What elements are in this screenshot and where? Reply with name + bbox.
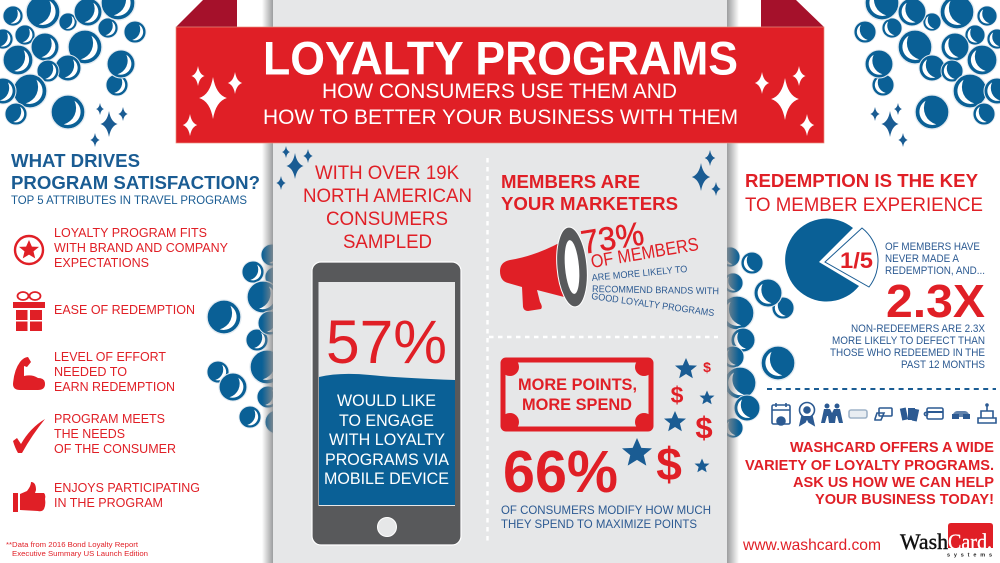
title banner (176, 0, 824, 143)
subtitle: HOW CONSUMERS USE THEM AND (322, 80, 677, 103)
attribute 4: THE NEEDS (54, 426, 125, 441)
bubbles: middle right (720, 247, 795, 438)
banner body (176, 27, 824, 143)
attribute 5: ENJOYS PARTICIPATING (54, 480, 200, 495)
attribute 1: EXPECTATIONS (54, 255, 149, 270)
icon: ticket (849, 410, 867, 418)
icon: card in hand (875, 408, 892, 420)
redemption text: OF MEMBERS HAVE (885, 241, 980, 253)
phone text: WOULD LIKE (337, 392, 436, 410)
stars and dollars (622, 358, 714, 490)
attribute 1: LOYALTY PROGRAM FITS (54, 225, 207, 240)
non-redeemers text (830, 323, 985, 371)
ticket box (501, 358, 653, 431)
ticket text (518, 376, 637, 414)
redemption text: REDEMPTION, AND... (885, 265, 985, 277)
heading (501, 171, 678, 214)
attribute 5: IN THE PROGRAM (54, 495, 163, 510)
members text (591, 264, 719, 319)
heading: MEMBERS ARE (501, 171, 640, 192)
heading (303, 163, 472, 253)
banner left fold (176, 0, 237, 27)
icon: check mark (13, 419, 45, 453)
heading: WHAT DRIVES (11, 150, 140, 171)
icon: thumbs up (13, 482, 45, 512)
icon: megaphone (500, 226, 590, 311)
non-redeemers text: PAST 12 MONTHS (901, 359, 985, 371)
logo: WashCard systems: systems (947, 552, 992, 558)
bubbles: top right (854, 0, 1000, 129)
members text: GOOD LOYALTY PROGRAMS (591, 291, 715, 319)
stat: 57%: 57% (326, 308, 447, 376)
heading: NORTH AMERICAN (303, 186, 472, 207)
consumers text (501, 503, 711, 531)
non-redeemers text: NON-REDEEMERS ARE 2.3X (851, 323, 985, 335)
icon: birthday cake (978, 404, 996, 423)
attribute 2: EASE OF REDEMPTION (54, 302, 195, 317)
sparkles (276, 146, 313, 190)
panel: mobile survey (276, 146, 472, 545)
website: www.washcard.com (742, 537, 881, 554)
subheading: TO MEMBER EXPERIENCE (745, 195, 983, 216)
heading: PROGRAM SATISFACTION? (11, 172, 260, 193)
center grey panel (262, 0, 739, 563)
attribute 3: NEEDED TO (54, 364, 127, 379)
members text: ARE MORE LIKELY TO (591, 264, 688, 284)
consumers text: OF CONSUMERS MODIFY HOW MUCH (501, 503, 711, 517)
logo: WashCard systems: Wash (900, 529, 948, 554)
icon: handshake people (821, 404, 843, 423)
attribute 5 (54, 480, 200, 510)
pie chart 1/5 (785, 219, 878, 302)
icon: gift (13, 292, 45, 331)
ticket text: MORE POINTS, (518, 376, 637, 394)
footnote (6, 540, 148, 558)
attribute 3: EARN REDEMPTION (54, 379, 175, 394)
attribute 4: OF THE CONSUMER (54, 441, 176, 456)
footnote: Executive Summary US Launch Edition (12, 549, 148, 558)
icon: ribbon award (800, 402, 814, 425)
ticket text: MORE SPEND (522, 396, 632, 414)
stat: 73% of members: OF MEMBERS (589, 233, 700, 272)
pie chart 1/5: 1/5 (840, 248, 873, 273)
logo: WashCard systems (900, 523, 993, 558)
non-redeemers text: THOSE WHO REDEEMED IN THE (830, 347, 985, 359)
panel: more points more spend (501, 358, 714, 531)
heading: YOUR MARKETERS (501, 193, 678, 214)
subtitle (263, 80, 738, 129)
stars and dollars: $ (695, 410, 713, 445)
stat: 73% of members (578, 215, 700, 272)
members text: RECOMMEND BRANDS WITH (592, 284, 719, 297)
heading (11, 150, 260, 193)
stat: 2.3X: 2.3X (886, 275, 985, 327)
sparkles: top left (90, 103, 128, 147)
call to action: ASK US HOW WE CAN HELP (793, 475, 994, 491)
banner right fold (761, 0, 824, 27)
banner sparkles (183, 66, 814, 136)
attribute 4 (54, 411, 176, 456)
attribute 3 (54, 349, 175, 394)
bubbles: top left (0, 0, 146, 129)
icon: calendar (772, 403, 790, 425)
footnote: **Data from 2016 Bond Loyalty Report (6, 540, 139, 549)
call to action (745, 440, 994, 508)
sparkles: top right (870, 103, 908, 147)
stat: 66%: 66% (503, 439, 618, 505)
redemption text (885, 241, 985, 277)
bubbles: middle left (207, 244, 289, 434)
logo: WashCard systems: Card. (948, 529, 992, 554)
phone text (324, 392, 449, 488)
redemption text: NEVER MADE A (885, 253, 960, 265)
non-redeemers text: MORE LIKELY TO DEFECT THAN (832, 335, 985, 347)
icon: star badge (15, 236, 43, 264)
call to action: VARIETY OF LOYALTY PROGRAMS. (745, 458, 994, 474)
icon: gift card (924, 408, 943, 419)
stat: 73% of members: 73% (578, 215, 646, 261)
attribute 1 (54, 225, 228, 270)
attribute 4: PROGRAM MEETS (54, 411, 165, 426)
consumers text: THEY SPEND TO MAXIMIZE POINTS (501, 517, 697, 531)
phone text: MOBILE DEVICE (324, 470, 449, 488)
attribute 3: LEVEL OF EFFORT (54, 349, 166, 364)
icon: cars (952, 411, 970, 419)
call to action: YOUR BUSINESS TODAY! (815, 492, 994, 508)
stars and dollars: $ (671, 382, 684, 408)
subheading: TOP 5 ATTRIBUTES IN TRAVEL PROGRAMS (11, 195, 247, 207)
phone text: PROGRAMS VIA (325, 451, 449, 469)
stars and dollars: $ (656, 438, 682, 490)
sparkles (692, 150, 721, 196)
panel: redemption (745, 170, 985, 371)
heading: CONSUMERS (326, 209, 448, 230)
phone text: WITH LOYALTY (329, 431, 445, 449)
panel: what drives satisfaction (6, 150, 260, 558)
attribute 1: WITH BRAND AND COMPANY (54, 240, 228, 255)
subtitle: HOW TO BETTER YOUR BUSINESS WITH THEM (263, 106, 738, 129)
call to action: WASHCARD OFFERS A WIDE (790, 440, 994, 456)
panel: members are marketers (500, 150, 721, 319)
icon: playing cards (900, 408, 919, 421)
heading: REDEMPTION IS THE KEY (745, 170, 978, 191)
icon: flexed arm (13, 357, 45, 390)
phone (312, 262, 461, 545)
dashed divider (767, 388, 996, 390)
stars and dollars: $ (703, 359, 711, 375)
center dividers (488, 158, 718, 545)
heading: SAMPLED (343, 232, 432, 253)
phone text: TO ENGAGE (339, 412, 434, 430)
title: LOYALTY PROGRAMS (263, 32, 738, 84)
icon row: loyalty program types (772, 402, 996, 425)
heading: WITH OVER 19K (315, 163, 459, 184)
